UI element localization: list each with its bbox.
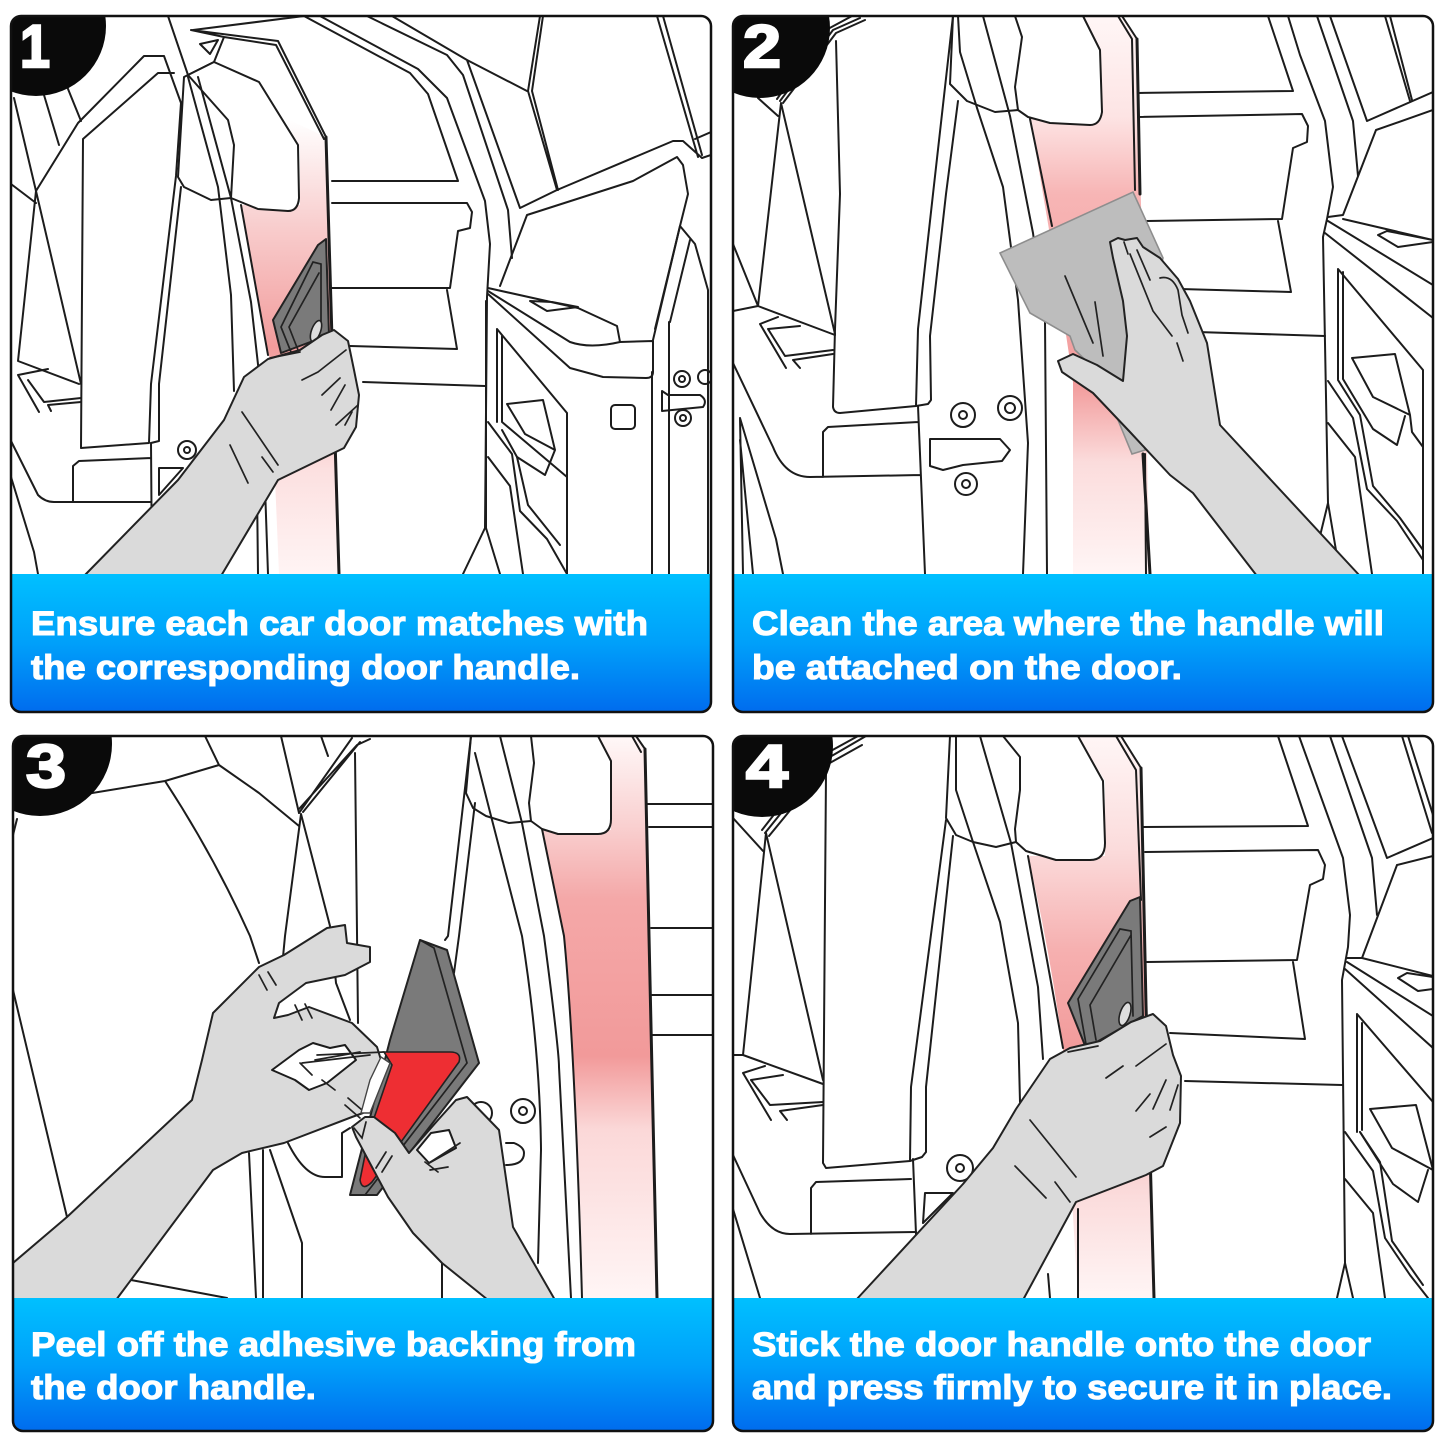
door handle: [1068, 897, 1143, 1048]
door handle: [350, 940, 479, 1195]
step text: and press firmly to secure it in place.: [752, 1369, 1392, 1407]
pink door pillar: [1030, 16, 1150, 574]
panel: step 1: [0, 0, 712, 712]
left hand: [13, 925, 384, 1300]
caption band: [13, 1298, 713, 1431]
number badge 4: 4: [746, 733, 789, 800]
car interior line art: [11, 16, 712, 574]
number badge 4: [734, 737, 833, 817]
pink door pillar: [542, 736, 657, 1300]
step text: be attached on the door.: [752, 649, 1182, 687]
step text: the corresponding door handle.: [31, 649, 580, 687]
step text: Stick the door handle onto the door: [752, 1326, 1371, 1364]
number badge 1: 1: [20, 13, 50, 80]
hand with cloth: [1058, 238, 1360, 576]
car interior line art: [733, 16, 1433, 574]
right hand: [352, 1097, 555, 1300]
number badge 2: [734, 17, 830, 98]
number badge 1: [12, 17, 106, 96]
car interior line art: [13, 736, 712, 1298]
caption band: [733, 574, 1433, 712]
step text: Peel off the adhesive backing from: [31, 1326, 636, 1364]
adhesive backing: [360, 1052, 460, 1187]
pink door pillar: [1028, 736, 1154, 1300]
hand: [84, 330, 359, 576]
caption band: [11, 574, 711, 712]
number badge 3: [14, 737, 112, 816]
panel: step 4: [732, 734, 1434, 1432]
step text: Ensure each car door matches with: [31, 605, 648, 643]
step text: the door handle.: [31, 1369, 316, 1407]
panel: step 3: [0, 672, 713, 1431]
peeled backing strip: [361, 1057, 390, 1113]
number badge 2: 2: [743, 13, 781, 80]
step text: Clean the area where the handle will: [752, 605, 1384, 643]
caption band: [733, 1298, 1433, 1431]
number badge 3: 3: [26, 733, 66, 800]
car interior line art: [733, 736, 1433, 1298]
pink door pillar: [241, 118, 339, 574]
panel: step 2: [690, 0, 1433, 712]
door handle: [273, 239, 329, 353]
hand: [856, 1014, 1181, 1300]
cleaning cloth: [1000, 192, 1163, 454]
step text: [752, 1326, 1392, 1407]
step text: [752, 605, 1384, 687]
step text: [31, 1326, 636, 1407]
step text: [31, 605, 648, 687]
